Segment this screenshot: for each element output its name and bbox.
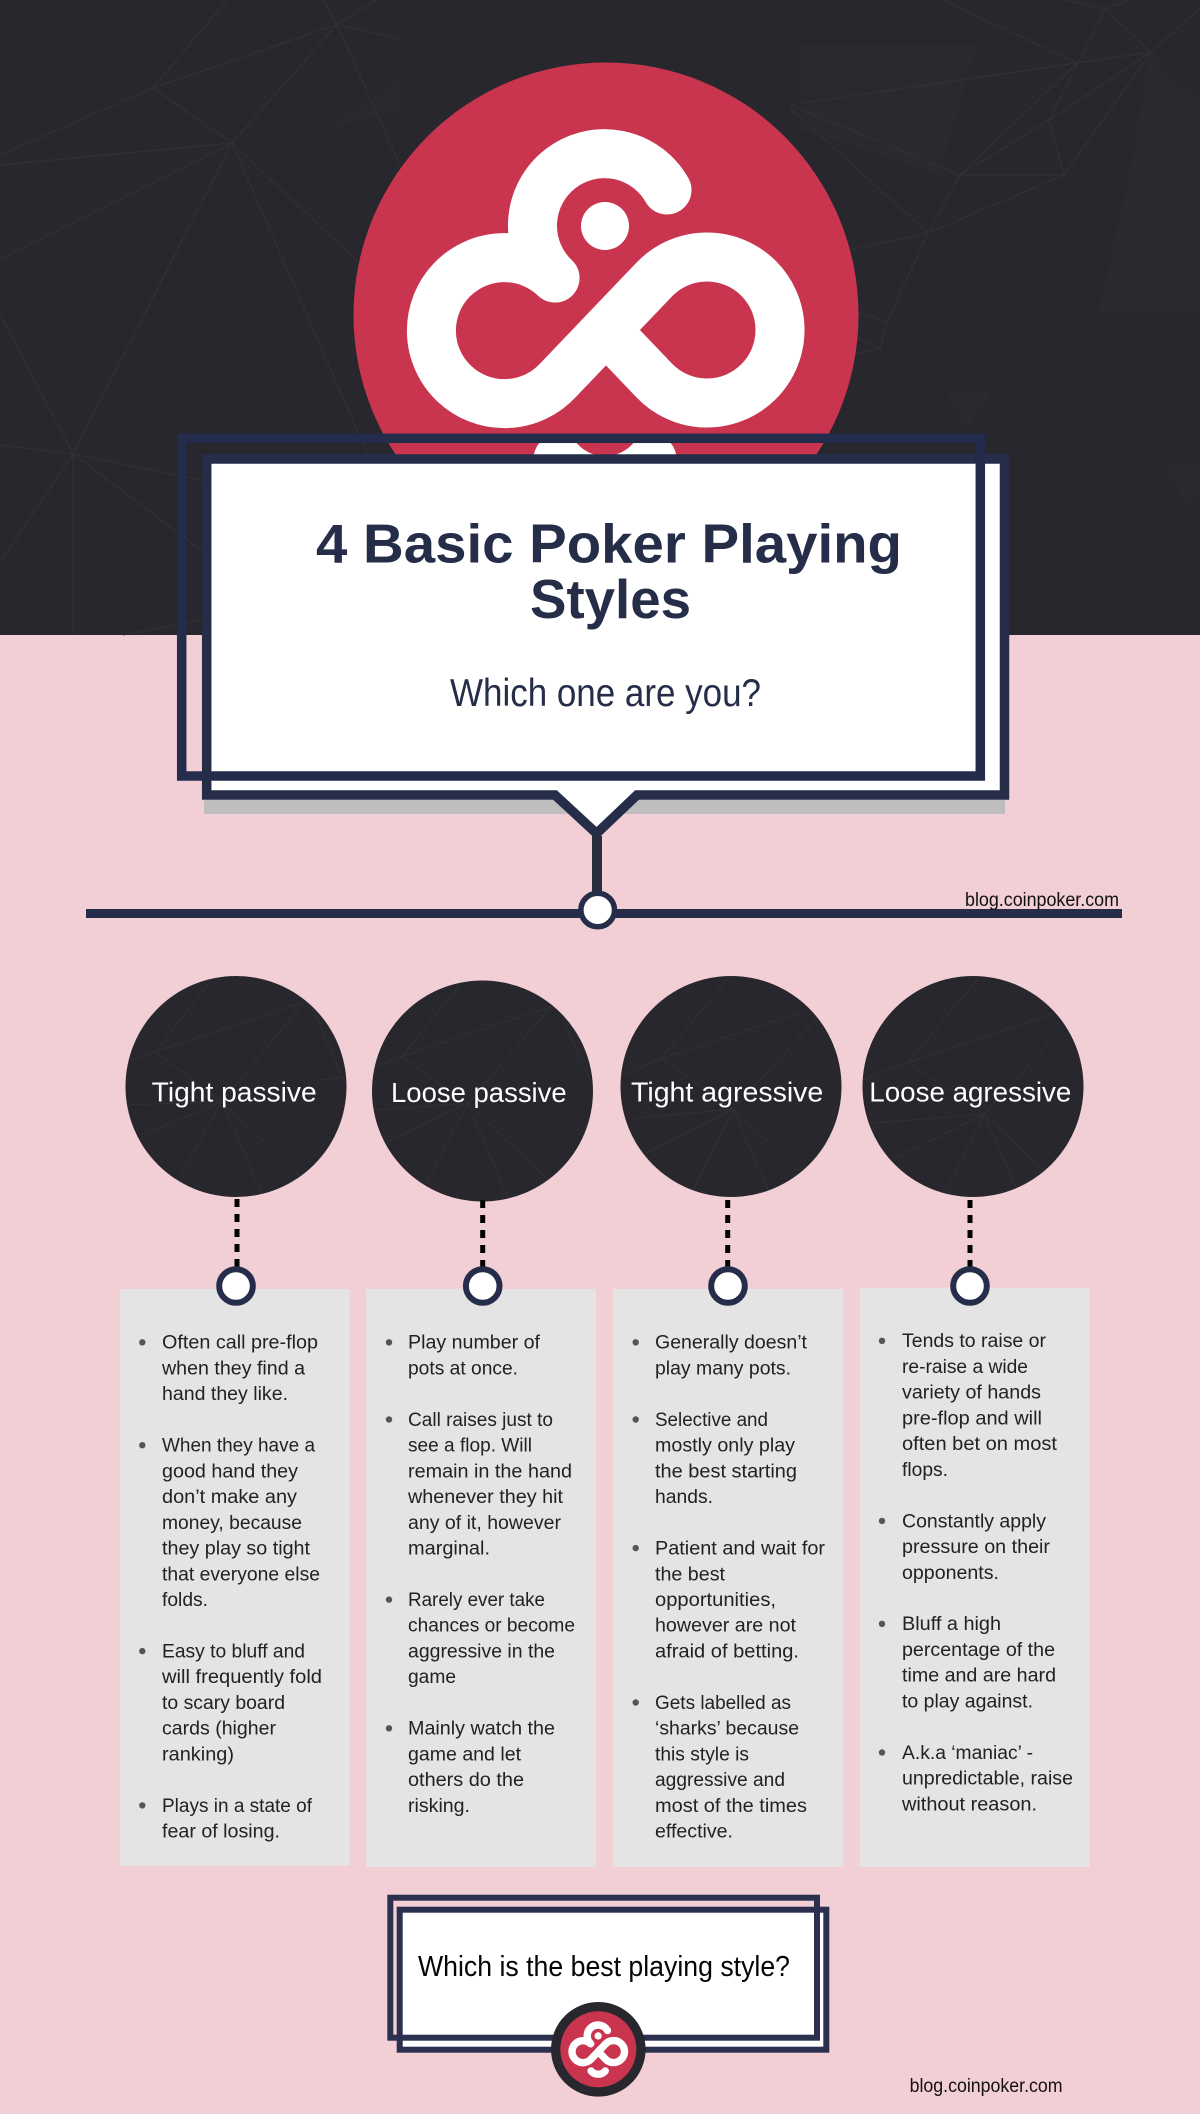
bottom callout frames: [390, 1898, 826, 2050]
icon: small white logo mark: [572, 2025, 624, 2074]
trait item: they play so tight: [162, 1538, 311, 1560]
trait item: the best starting: [655, 1461, 797, 1482]
bottom logo badge: [551, 2002, 646, 2097]
trait item: Constantly apply: [902, 1511, 1047, 1532]
site credit bottom: blog.coinpoker.com: [910, 2076, 1063, 2097]
trait item: Patient and wait for: [655, 1538, 826, 1560]
trait item: aggressive and: [655, 1770, 785, 1791]
trait item: opponents.: [902, 1563, 999, 1584]
trait item: [632, 1538, 826, 1662]
divider node circle: [581, 893, 614, 927]
trait item: game: [408, 1667, 456, 1688]
trait item: [139, 1436, 320, 1611]
trait item: play many pots.: [655, 1358, 791, 1379]
trait item: [386, 1719, 555, 1817]
panel: tight passive traits: [120, 1289, 350, 1866]
trait item: [386, 1333, 541, 1379]
trait item: remain in the hand: [408, 1461, 572, 1482]
trait item: marginal.: [408, 1538, 490, 1560]
trait item: variety of hands: [902, 1383, 1041, 1404]
trait item: whenever they hit: [407, 1487, 564, 1508]
trait item: Tends to raise or: [902, 1331, 1047, 1352]
panel: tight agressive traits: [613, 1289, 843, 1867]
trait item: don’t make any: [162, 1487, 298, 1508]
trait item: see a flop. Will: [408, 1436, 532, 1457]
trait item: [139, 1642, 322, 1765]
subtitle: Which one are you?: [450, 672, 761, 715]
trait item: hand they like.: [162, 1384, 288, 1405]
trait item: [879, 1331, 1058, 1481]
trait item: pre-flop and will: [902, 1408, 1042, 1429]
trait item: often bet on most: [902, 1434, 1058, 1455]
trait item: effective.: [655, 1822, 733, 1843]
trait item: time and are hard: [902, 1666, 1056, 1687]
bottom callout question: Which is the best playing style?: [418, 1951, 790, 1983]
style heading: Tight agressive: [620, 976, 842, 1197]
style heading: Loose agressive: Loose agressive: [869, 1077, 1071, 1108]
trait item: [139, 1796, 313, 1843]
style heading: Loose agressive: [862, 976, 1084, 1197]
trait item: Plays in a state of: [162, 1796, 313, 1817]
trait item: when they find a: [161, 1358, 305, 1379]
trait item: risking.: [408, 1796, 470, 1817]
trait item: Selective and: [655, 1410, 768, 1431]
trait item: Play number of: [408, 1333, 541, 1354]
panel: loose passive traits: [366, 1289, 596, 1867]
trait item: [386, 1410, 572, 1560]
trait item: flops.: [902, 1460, 948, 1481]
trait item: mostly only play: [655, 1436, 796, 1457]
title: Styles: [530, 568, 691, 630]
trait item: [879, 1614, 1056, 1712]
trait item: pots at once.: [408, 1358, 518, 1379]
large red logo circle: [354, 62, 858, 568]
trait item: Easy to bluff and: [162, 1642, 305, 1662]
trait item: [139, 1333, 318, 1405]
trait item: Often call pre-flop: [162, 1333, 318, 1354]
trait item: fear of losing.: [162, 1822, 280, 1843]
title card speech-bubble frame: [207, 459, 1004, 834]
trait item: [632, 1410, 797, 1508]
trait item: ‘sharks’ because: [655, 1719, 799, 1740]
node circles above panels: [219, 1269, 987, 1303]
trait item: without reason.: [901, 1794, 1037, 1815]
trait item: any of it, however: [408, 1513, 562, 1534]
trait item: [632, 1333, 808, 1379]
trait item: however are not: [655, 1616, 797, 1637]
trait item: [879, 1511, 1051, 1584]
trait item: money, because: [162, 1513, 302, 1534]
trait item: cards (higher: [162, 1719, 277, 1740]
trait item: Gets labelled as: [655, 1693, 791, 1714]
trait item: this style is: [655, 1744, 749, 1765]
trait item: A.k.a ‘maniac’ -: [902, 1743, 1033, 1764]
trait item: good hand they: [162, 1461, 299, 1482]
trait item: afraid of betting.: [655, 1642, 799, 1662]
trait item: folds.: [162, 1590, 208, 1611]
style heading: Tight passive: [126, 976, 347, 1197]
offset title card outline: [182, 438, 980, 776]
connector stem: [592, 836, 602, 896]
trait item: that everyone else: [162, 1564, 320, 1585]
trait item: hands.: [655, 1487, 713, 1508]
trait item: to scary board: [162, 1693, 285, 1714]
title: 4 Basic Poker Playing: [316, 513, 902, 575]
style heading: Loose passive: Loose passive: [391, 1077, 567, 1108]
trait item: Rarely ever take: [408, 1590, 545, 1611]
trait item: Generally doesn’t: [655, 1333, 808, 1354]
trait item: re-raise a wide: [902, 1357, 1028, 1378]
panel: loose agressive traits: [860, 1288, 1090, 1867]
trait item: unpredictable, raise: [902, 1769, 1073, 1790]
title: [316, 513, 902, 630]
trait item: others do the: [408, 1770, 524, 1791]
trait item: the best: [655, 1564, 726, 1585]
trait item: to play against.: [902, 1691, 1033, 1712]
dotted connectors: [237, 1199, 970, 1268]
trait item: game and let: [408, 1744, 522, 1765]
horizontal divider line: [86, 909, 1122, 918]
trait item: most of the times: [655, 1796, 807, 1817]
trait item: [879, 1743, 1073, 1815]
trait item: Bluff a high: [902, 1614, 1001, 1635]
trait item: pressure on their: [902, 1537, 1051, 1558]
trait item: ranking): [162, 1744, 234, 1765]
trait item: Call raises just to: [408, 1410, 553, 1431]
style heading: Loose passive: [372, 980, 593, 1202]
site credit top: blog.coinpoker.com: [965, 890, 1119, 911]
dark header background with polygon mesh: [0, 0, 1200, 635]
style heading: Tight agressive: Tight agressive: [631, 1077, 823, 1108]
trait item: percentage of the: [902, 1640, 1055, 1661]
trait item: chances or become: [408, 1616, 575, 1637]
icon: white CoinPoker logo mark: [431, 154, 780, 481]
trait item: [632, 1693, 807, 1843]
trait item: [386, 1590, 575, 1688]
trait item: will frequently fold: [161, 1667, 322, 1688]
trait item: Mainly watch the: [408, 1719, 555, 1740]
trait item: opportunities,: [655, 1590, 776, 1611]
trait item: aggressive in the: [408, 1642, 555, 1662]
trait item: When they have a: [162, 1436, 315, 1457]
style heading: Tight passive: Tight passive: [152, 1077, 317, 1108]
title card drop shadow: [204, 800, 1005, 814]
